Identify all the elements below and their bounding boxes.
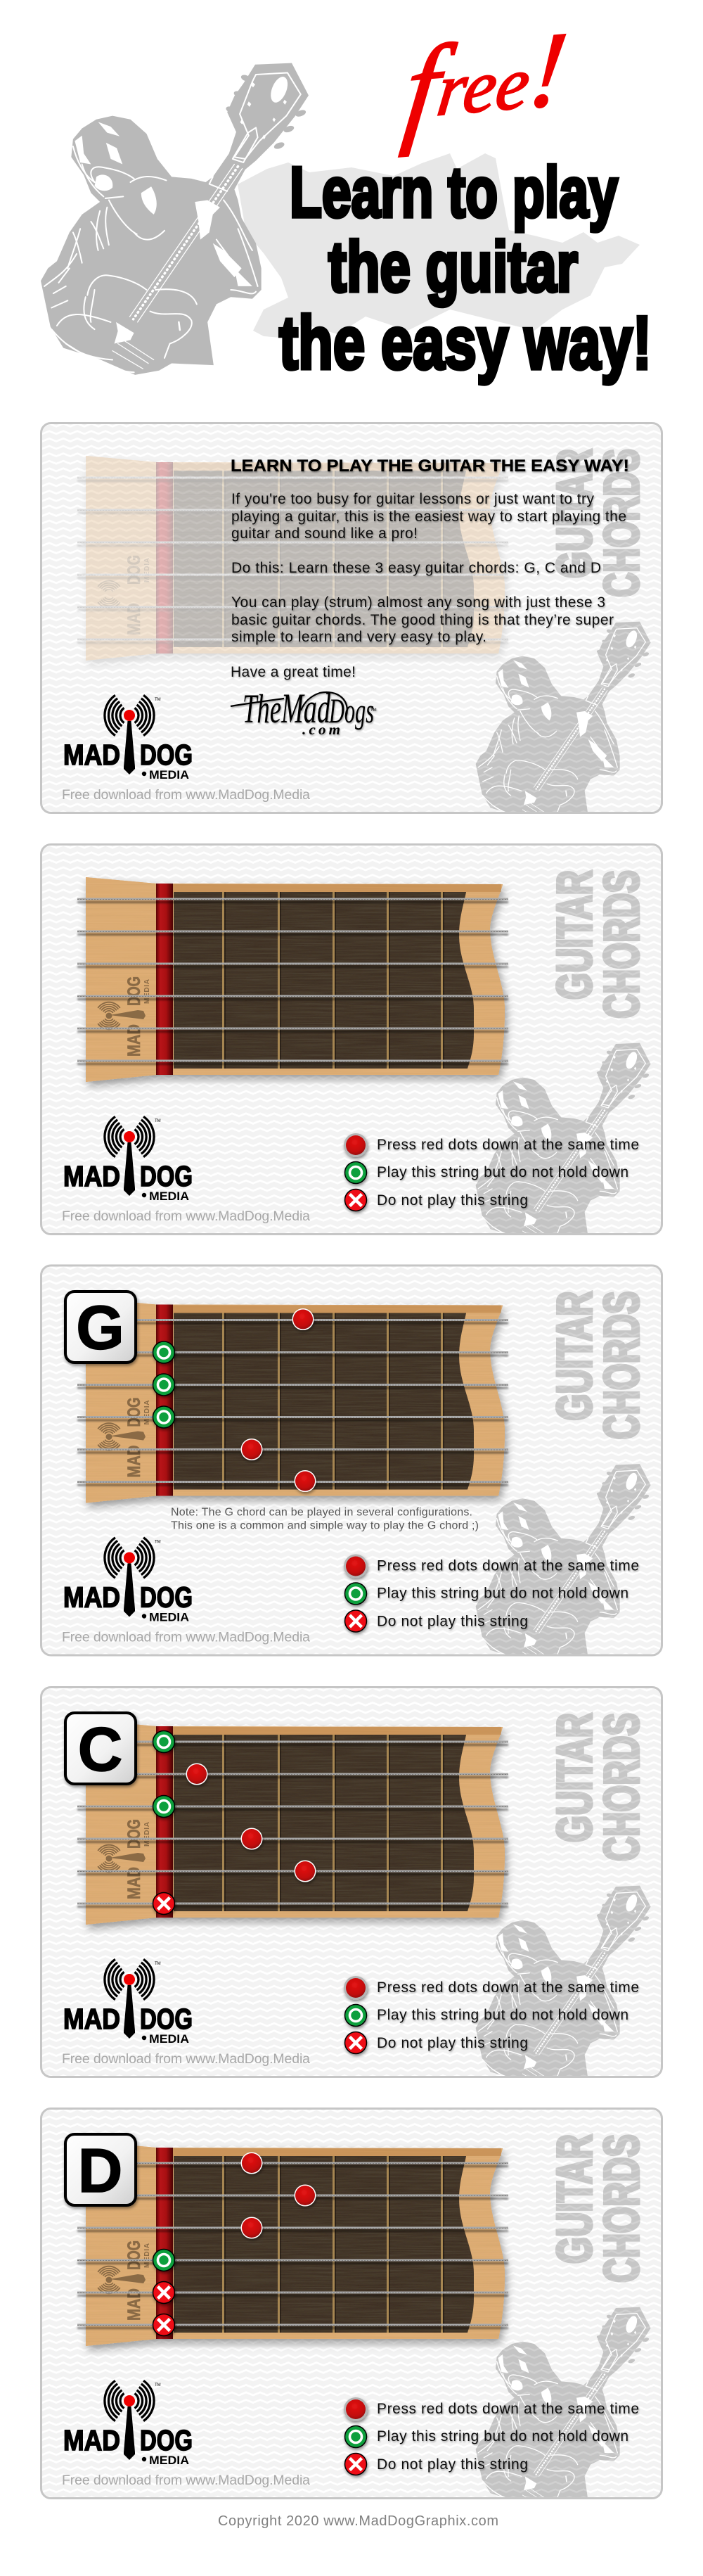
guitar chords watermark bbox=[547, 449, 649, 597]
fretboard: DOG bbox=[124, 976, 144, 1006]
dot: open string 3 bbox=[153, 1374, 174, 1396]
dot: press string 5 bbox=[294, 1860, 316, 1882]
logo bbox=[63, 695, 193, 782]
dot: press string 5 bbox=[240, 1439, 263, 1460]
legend bbox=[344, 1976, 639, 2054]
guitarist watermark bbox=[476, 1043, 651, 1246]
guitar chords watermark: GUITAR bbox=[547, 2134, 602, 2264]
panel: G chord bbox=[41, 1265, 662, 1668]
fretboard: MEDIA bbox=[143, 2243, 151, 2268]
legend: Do not play this string bbox=[377, 1192, 528, 1209]
G chord note bbox=[171, 1507, 479, 1532]
fretboard: DOG bbox=[124, 1397, 144, 1427]
guitar chords watermark bbox=[547, 1713, 649, 1861]
dot: open string 4 bbox=[153, 1406, 174, 1428]
legend bbox=[344, 2397, 639, 2475]
guitar chords watermark: GUITAR bbox=[547, 870, 602, 1000]
fretboard bbox=[77, 877, 508, 1082]
download note: Free download from www.MadDog.Media bbox=[62, 2051, 310, 2067]
legend: Do not play this string bbox=[377, 2035, 528, 2051]
legend: Press red dots down at the same time bbox=[377, 1137, 639, 1153]
brush stroke background bbox=[238, 153, 640, 338]
fretboard: MEDIA bbox=[143, 979, 151, 1004]
logo bbox=[63, 1538, 193, 1624]
fretboard: MAD bbox=[124, 2288, 144, 2321]
panel: D chord bbox=[41, 2108, 662, 2511]
dot: press string 2 bbox=[294, 2185, 316, 2206]
G chord note: This one is a common and simple way to play the G chord ;) bbox=[171, 1519, 479, 1532]
logo: MEDIA bbox=[149, 1190, 189, 1203]
guitar chords watermark: CHORDS bbox=[594, 449, 649, 597]
signature: Mad bbox=[280, 685, 331, 732]
dot: open string 2 bbox=[153, 1341, 174, 1363]
logo: DOG bbox=[140, 1581, 193, 1614]
logo: DOG bbox=[140, 739, 193, 771]
legend bbox=[344, 1133, 639, 1211]
logo: MEDIA bbox=[149, 769, 189, 782]
guitar chords watermark: CHORDS bbox=[594, 1292, 649, 1439]
logo bbox=[63, 2380, 193, 2467]
logo: TM bbox=[155, 2383, 161, 2387]
dot: press string 1 bbox=[292, 1308, 314, 1330]
guitar chords watermark bbox=[547, 1292, 649, 1439]
legend bbox=[344, 1555, 639, 1632]
download note: Free download from www.MadDog.Media bbox=[62, 2473, 310, 2488]
guitarist watermark bbox=[476, 2307, 651, 2511]
chord letter D: D bbox=[78, 2136, 122, 2205]
guitarist illustration bbox=[41, 63, 309, 375]
faded fretboard: DOG bbox=[124, 555, 144, 585]
legend: Press red dots down at the same time bbox=[377, 2401, 639, 2417]
legend: Play this string but do not hold down bbox=[377, 2007, 628, 2023]
free! script title: ree bbox=[433, 40, 534, 132]
intro copy: playing a guitar, this is the easiest way to start playing the bbox=[231, 509, 626, 525]
fretboard: DOG bbox=[124, 2240, 144, 2270]
dot: open string 3 bbox=[153, 1795, 174, 1818]
chord letter G bbox=[65, 1292, 136, 1363]
free! script title: ! bbox=[524, 9, 573, 131]
intro copy: basic guitar chords. The good thing is that they’re super bbox=[231, 612, 614, 628]
legend: Press red dots down at the same time bbox=[377, 1979, 639, 1996]
intro copy: LEARN TO PLAY THE GUITAR THE EASY WAY! bbox=[231, 457, 629, 476]
download note: Free download from www.MadDog.Media bbox=[62, 787, 310, 803]
guitar chords watermark: CHORDS bbox=[594, 1713, 649, 1861]
fretboard: MAD bbox=[124, 1024, 144, 1057]
dot: open string 4 bbox=[153, 2250, 174, 2271]
logo: MAD bbox=[63, 2424, 120, 2456]
dot: open string 1 bbox=[153, 1730, 174, 1753]
logo: MAD bbox=[63, 1160, 120, 1192]
logo: MAD bbox=[63, 1581, 120, 1614]
intro copy: Have a great time! bbox=[231, 664, 356, 680]
fretboard bbox=[77, 2141, 508, 2346]
panel: C chord bbox=[41, 1687, 662, 2089]
guitar chords watermark bbox=[547, 870, 649, 1019]
signature: Dogs bbox=[328, 691, 374, 730]
guitar chords watermark: CHORDS bbox=[594, 2134, 649, 2283]
dot: muted string 6 bbox=[153, 1892, 174, 1915]
logo: TM bbox=[155, 1541, 161, 1545]
logo bbox=[63, 1116, 193, 1203]
dot: press string 6 bbox=[294, 1470, 316, 1492]
G chord note: Note: The G chord can be played in several configurations. bbox=[171, 1507, 472, 1518]
panel: intro bbox=[41, 423, 662, 825]
legend: Do not play this string bbox=[377, 2456, 528, 2473]
guitar chords watermark: GUITAR bbox=[547, 449, 602, 578]
fretboard: DOG bbox=[124, 1819, 144, 1849]
signature: .com bbox=[302, 721, 340, 738]
guitarist watermark bbox=[476, 1886, 651, 2089]
signature: TM bbox=[370, 708, 377, 713]
fretboard bbox=[77, 1299, 508, 1503]
guitar chords watermark: CHORDS bbox=[594, 870, 649, 1019]
dot: press string 2 bbox=[186, 1763, 208, 1785]
dot: press string 1 bbox=[240, 2153, 263, 2174]
download note: Free download from www.MadDog.Media bbox=[62, 1209, 310, 1224]
chord letter C: C bbox=[78, 1714, 122, 1784]
signature bbox=[231, 685, 377, 738]
logo: MAD bbox=[63, 2003, 120, 2035]
download note: Free download from www.MadDog.Media bbox=[62, 1629, 310, 1645]
legend: Play this string but do not hold down bbox=[377, 1164, 628, 1180]
legend: Press red dots down at the same time bbox=[377, 1557, 639, 1574]
free! script title: f bbox=[397, 20, 460, 158]
copyright: Copyright 2020 www.MadDogGraphix.com bbox=[218, 2513, 498, 2529]
legend: Do not play this string bbox=[377, 1614, 528, 1629]
chord letter C bbox=[65, 1713, 136, 1784]
faded fretboard bbox=[77, 456, 508, 661]
logo: DOG bbox=[140, 2003, 193, 2035]
headline: the guitar bbox=[328, 228, 578, 307]
faded fretboard: MEDIA bbox=[143, 558, 151, 582]
fretboard: MEDIA bbox=[143, 1822, 151, 1847]
intro copy: Do this: Learn these 3 easy guitar chords: G, C and D bbox=[231, 560, 601, 576]
header bbox=[41, 9, 652, 385]
dot: muted string 5 bbox=[153, 2282, 174, 2303]
guitar chords watermark: GUITAR bbox=[547, 1292, 602, 1421]
signature: The bbox=[243, 686, 281, 732]
fretboard: MAD bbox=[124, 1867, 144, 1899]
logo: TM bbox=[155, 698, 161, 702]
chord letter D bbox=[65, 2134, 136, 2205]
dot: press string 4 bbox=[240, 1828, 263, 1850]
guitarist watermark bbox=[476, 1464, 651, 1668]
logo: TM bbox=[155, 1962, 161, 1966]
dot: press string 3 bbox=[240, 2217, 263, 2238]
dot: muted string 6 bbox=[153, 2314, 174, 2335]
guitarist watermark bbox=[476, 622, 651, 825]
legend: Play this string but do not hold down bbox=[377, 1586, 628, 1601]
logo: DOG bbox=[140, 1160, 193, 1192]
logo: MAD bbox=[63, 739, 120, 771]
fretboard: MAD bbox=[124, 1445, 144, 1477]
intro copy: If you're too busy for guitar lessons or just want to try bbox=[231, 491, 595, 507]
intro copy bbox=[231, 457, 629, 680]
intro copy: simple to learn and very easy to play. bbox=[231, 629, 486, 645]
logo: DOG bbox=[140, 2424, 193, 2456]
legend: Play this string but do not hold down bbox=[377, 2428, 628, 2444]
logo: MEDIA bbox=[149, 2033, 189, 2046]
chord letter G: G bbox=[76, 1293, 124, 1362]
intro copy: You can play (strum) almost any song with just these 3 bbox=[231, 594, 605, 611]
headline bbox=[279, 153, 652, 385]
intro copy: guitar and sound like a pro! bbox=[231, 525, 418, 542]
fretboard bbox=[77, 1720, 508, 1925]
panel: blank fretboard bbox=[41, 844, 662, 1246]
logo: MEDIA bbox=[149, 2454, 189, 2467]
fretboard: MEDIA bbox=[143, 1400, 151, 1425]
logo: TM bbox=[155, 1119, 161, 1123]
guitar chords watermark: GUITAR bbox=[547, 1713, 602, 1842]
logo: MEDIA bbox=[149, 1611, 189, 1624]
guitar chords watermark bbox=[547, 2134, 649, 2283]
faded fretboard: MAD bbox=[124, 603, 144, 635]
logo bbox=[63, 1959, 193, 2046]
